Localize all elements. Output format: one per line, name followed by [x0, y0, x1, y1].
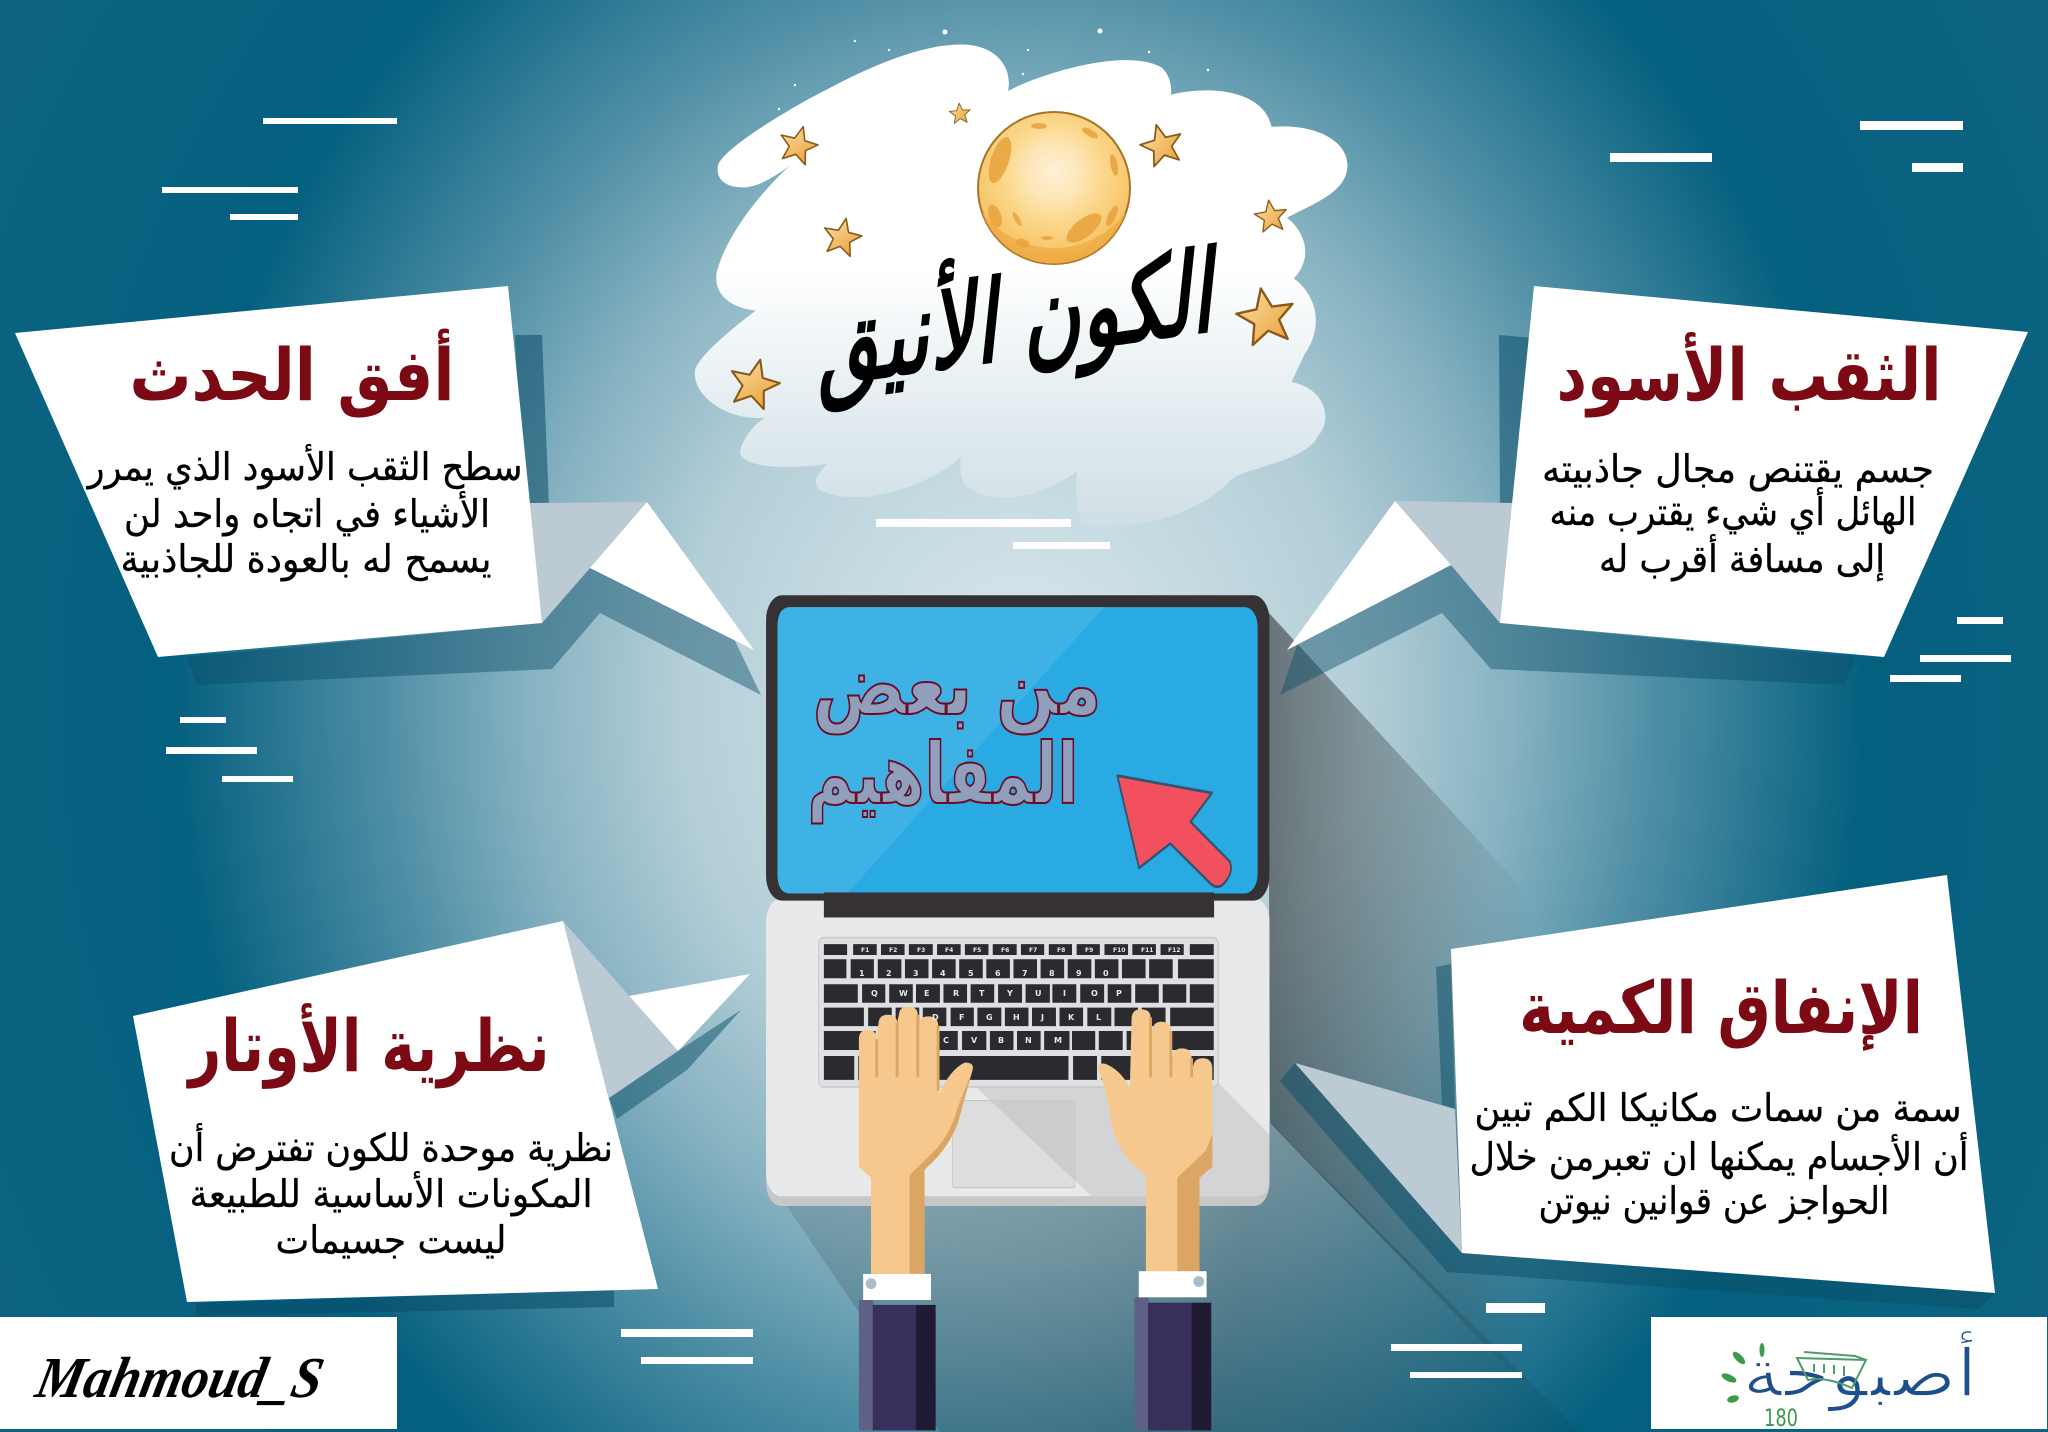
key labels: I — [1063, 989, 1066, 998]
key labels: F11 — [1141, 947, 1153, 954]
panel: black hole callout — [1280, 286, 2028, 695]
keys — [824, 944, 1214, 1080]
callout shadows — [1280, 964, 1995, 1309]
panel: event horizon callout — [15, 286, 761, 695]
card — [1500, 286, 2028, 657]
key labels: G — [986, 1013, 993, 1022]
key labels: M — [1054, 1036, 1062, 1045]
hinge — [824, 892, 1214, 917]
base shadow — [968, 1080, 1269, 1196]
key labels: F8 — [1057, 947, 1065, 954]
fold — [530, 502, 647, 623]
body text: المكونات الأساسية للطبيعة — [190, 1170, 592, 1217]
body text: يسمح له بالعودة للجاذبية — [120, 537, 492, 582]
key labels: E — [924, 989, 929, 998]
key labels: 0 — [1103, 969, 1109, 978]
right sleeve — [1134, 1297, 1211, 1430]
key labels: 8 — [1049, 969, 1055, 978]
stars — [725, 102, 1298, 411]
key labels: F9 — [1085, 947, 1093, 954]
laptop screen shadow — [1268, 612, 1800, 1432]
screen text: المفاهيم — [808, 725, 1078, 824]
key labels: 5 — [968, 969, 974, 978]
right shirt cuff — [1139, 1271, 1207, 1297]
key labels: H — [1013, 1013, 1020, 1022]
key labels: J — [1040, 1013, 1044, 1022]
key labels: V — [971, 1036, 978, 1045]
key labels: F5 — [973, 947, 981, 954]
callout shadows — [196, 1010, 741, 1316]
key labels: 9 — [1076, 969, 1082, 978]
cloud shape — [695, 45, 1347, 527]
key labels: 3 — [913, 969, 919, 978]
fold — [1395, 501, 1513, 623]
cloud title panel — [695, 28, 1347, 527]
key labels: F10 — [1113, 947, 1125, 954]
key labels: F4 — [945, 947, 953, 954]
body text: الهائل أي شيء يقترب منه — [1550, 487, 1916, 535]
body text: أن الأجسام يمكنها ان تعبرمن خلال — [1470, 1132, 1968, 1180]
key labels: Y — [1006, 989, 1013, 998]
heading: نظرية الأوتار — [186, 1002, 550, 1089]
key labels: K — [1068, 1013, 1075, 1022]
screen — [766, 595, 1269, 901]
key labels: B — [998, 1036, 1004, 1045]
key labels: 1 — [859, 969, 865, 978]
title: الكون الأنيق — [815, 221, 1226, 414]
key labels: 2 — [886, 969, 892, 978]
fold — [563, 921, 678, 1098]
icon: cursor arrow — [1117, 776, 1231, 887]
body text: سمة من سمات مكانيكا الكم تبين — [1474, 1086, 1962, 1131]
tail — [629, 974, 750, 1051]
right hand — [1098, 1009, 1212, 1272]
screen text: من بعض — [812, 636, 1102, 735]
trackpad — [952, 1101, 1075, 1188]
key labels: O — [1091, 989, 1098, 998]
key labels: R — [953, 989, 959, 998]
key labels: 7 — [1022, 969, 1028, 978]
key labels: 4 — [940, 969, 946, 978]
key labels: N — [1025, 1036, 1032, 1045]
decorative white stripes — [162, 118, 2011, 1378]
key labels: F2 — [889, 947, 897, 954]
panel: string theory callout — [133, 921, 750, 1316]
body text: نظرية موحدة للكون تفترض أن — [169, 1123, 613, 1171]
key labels: F6 — [1001, 947, 1009, 954]
laptop base shadow — [786, 1123, 1580, 1432]
panel: quantum tunneling callout — [1280, 875, 1995, 1309]
key labels: F7 — [1029, 947, 1037, 954]
body text: إلى مسافة أقرب له — [1599, 534, 1885, 582]
author name: Mahmoud_S — [30, 1346, 329, 1410]
footer: author box — [0, 1317, 397, 1429]
left hand — [859, 1007, 973, 1274]
key labels: L — [1096, 1013, 1101, 1022]
key labels: F — [959, 1013, 964, 1022]
body text: ليست جسيمات — [276, 1218, 506, 1262]
tail — [1287, 501, 1451, 650]
laptop — [766, 595, 1269, 1430]
logo wordmark: أصبوحة — [1742, 1330, 1978, 1412]
key labels: F12 — [1168, 947, 1180, 954]
laptop base — [766, 898, 1269, 1206]
body text — [86, 443, 522, 582]
keyboard well — [819, 938, 1218, 1087]
key labels: F1 — [861, 947, 869, 954]
key labels: T — [979, 989, 985, 998]
body text: سطح الثقب الأسود الذي يمرر — [86, 443, 522, 490]
key labels — [859, 947, 1180, 1045]
card — [15, 286, 542, 657]
callout shadows — [187, 335, 761, 695]
key labels: Q — [871, 989, 878, 998]
key labels: F3 — [917, 947, 925, 954]
sparkle dots — [778, 28, 1209, 110]
key labels: C — [943, 1036, 949, 1045]
callout shadows — [1280, 335, 1856, 695]
body text: الحواجز عن قوانين نيوتن — [1538, 1179, 1890, 1224]
body text: الأشياء في اتجاه واحد لن — [124, 490, 490, 537]
card — [1451, 875, 1995, 1293]
body text: جسم يقتنص مجال جاذبيته — [1542, 447, 1934, 492]
key labels: W — [899, 989, 908, 998]
fold — [1295, 1063, 1462, 1253]
left sleeve — [859, 1300, 936, 1430]
body text — [1470, 1086, 1968, 1224]
screen text — [808, 636, 1102, 824]
tail — [590, 502, 754, 650]
heading: أفق الحدث — [130, 328, 454, 418]
body text — [169, 1123, 613, 1262]
footer: logo box — [1651, 1317, 2047, 1432]
icon: moon — [978, 112, 1130, 264]
icon: building — [1797, 1352, 1866, 1388]
body text — [1542, 447, 1934, 582]
heading: الإنفاق الكمية — [1519, 966, 1923, 1051]
logo number: 180 — [1764, 1404, 1798, 1432]
card — [133, 921, 658, 1302]
key labels: D — [932, 1013, 939, 1022]
heading: الثقب الأسود — [1556, 331, 1942, 418]
key labels: U — [1035, 989, 1042, 998]
key labels: 6 — [995, 969, 1001, 978]
icon: leaves — [1720, 1343, 1764, 1404]
key labels: P — [1116, 989, 1122, 998]
left shirt cuff — [863, 1274, 931, 1300]
